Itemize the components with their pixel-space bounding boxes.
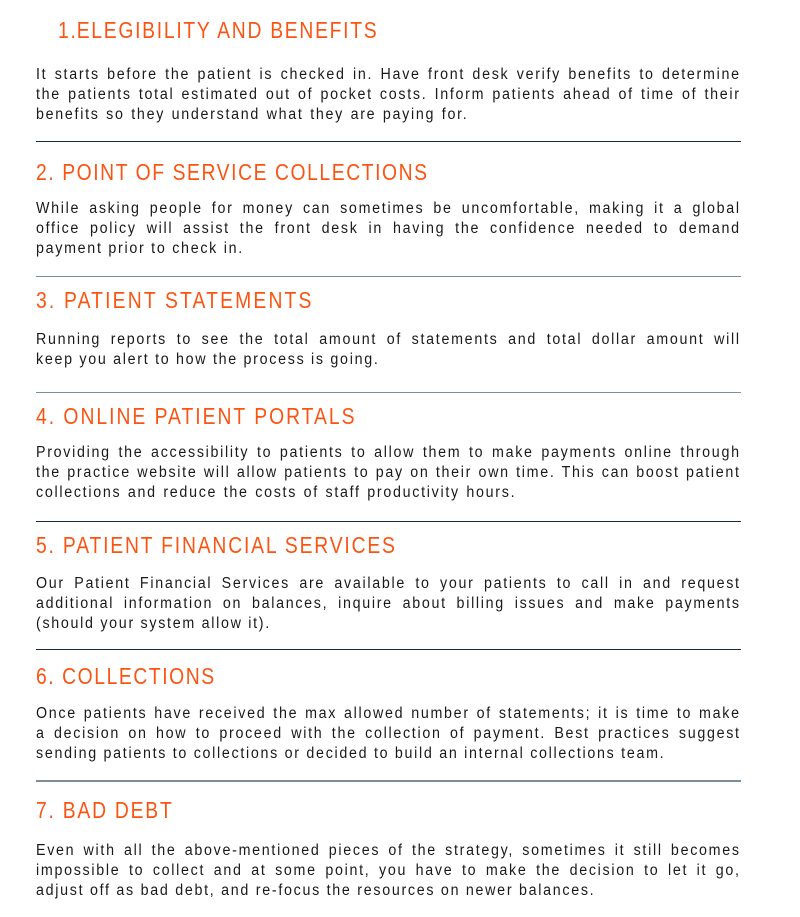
body text 1: benefits so they understand what they are paying for. (36, 106, 468, 123)
section 6: collections (36, 663, 741, 762)
heading 2: 2. POINT OF SERVICE COLLECTIONS (36, 159, 429, 185)
body text 2: payment prior to check in. (36, 240, 244, 257)
body text 1 (36, 66, 741, 123)
body text 1: the patients total estimated out of pocket costs. Inform patients ahead of time of their (36, 86, 741, 103)
section 2: point of service collections (36, 159, 741, 257)
body text 6 (36, 705, 741, 762)
body text 5: additional information on balances, inquire about billing issues and make payments (36, 595, 741, 612)
body text 7: impossible to collect and at some point, you have to make the decision to let it go, (36, 862, 741, 879)
body text 3: Running reports to see the total amount of statements and total dollar amount will (36, 331, 741, 348)
body text 1: It starts before the patient is checked in. Have front desk verify benefits to determine (36, 66, 741, 83)
heading 6: 6. COLLECTIONS (36, 663, 216, 689)
heading 7: 7. BAD DEBT (36, 797, 174, 823)
body text 6: sending patients to collections or decided to build an internal collections team. (36, 745, 665, 762)
body text 6: Once patients have received the max allowed number of statements; it is time to make (36, 705, 741, 722)
section 1: eligibility and benefits (36, 17, 741, 123)
body text 2: office policy will assist the front desk in having the confidence needed to demand (36, 220, 741, 237)
body text 7: Even with all the above-mentioned pieces of the strategy, sometimes it still becomes (36, 842, 741, 859)
heading 5: 5. PATIENT FINANCIAL SERVICES (36, 532, 397, 558)
section 4: online patient portals (36, 403, 741, 501)
section 3: patient statements (36, 287, 741, 368)
body text 4: the practice website will allow patients to pay on their own time. This can boost patient (36, 464, 741, 481)
body text 4: collections and reduce the costs of staff productivity hours. (36, 484, 516, 501)
heading 4: 4. ONLINE PATIENT PORTALS (36, 403, 356, 429)
body text 6: a decision on how to proceed with the collection of payment. Best practices suggest (36, 725, 741, 742)
body text 7 (36, 842, 741, 899)
body text 7: adjust off as bad debt, and re-focus the resources on newer balances. (36, 882, 595, 899)
section 7: bad debt (36, 797, 741, 899)
body text 4 (36, 444, 741, 501)
heading 1: 1.ELEGIBILITY AND BENEFITS (58, 17, 378, 43)
body text 2: While asking people for money can sometimes be uncomfortable, making it a global (36, 200, 741, 217)
body text 5: Our Patient Financial Services are available to your patients to call in and request (36, 575, 741, 592)
body text 4: Providing the accessibility to patients to allow them to make payments online through (36, 444, 741, 461)
body text 3: keep you alert to how the process is going. (36, 351, 380, 368)
body text 3 (36, 331, 741, 368)
body text 5: (should your system allow it). (36, 615, 271, 632)
body text 2 (36, 200, 741, 257)
section 5: patient financial services (36, 532, 741, 632)
heading 3: 3. PATIENT STATEMENTS (36, 287, 314, 313)
body text 5 (36, 575, 741, 632)
